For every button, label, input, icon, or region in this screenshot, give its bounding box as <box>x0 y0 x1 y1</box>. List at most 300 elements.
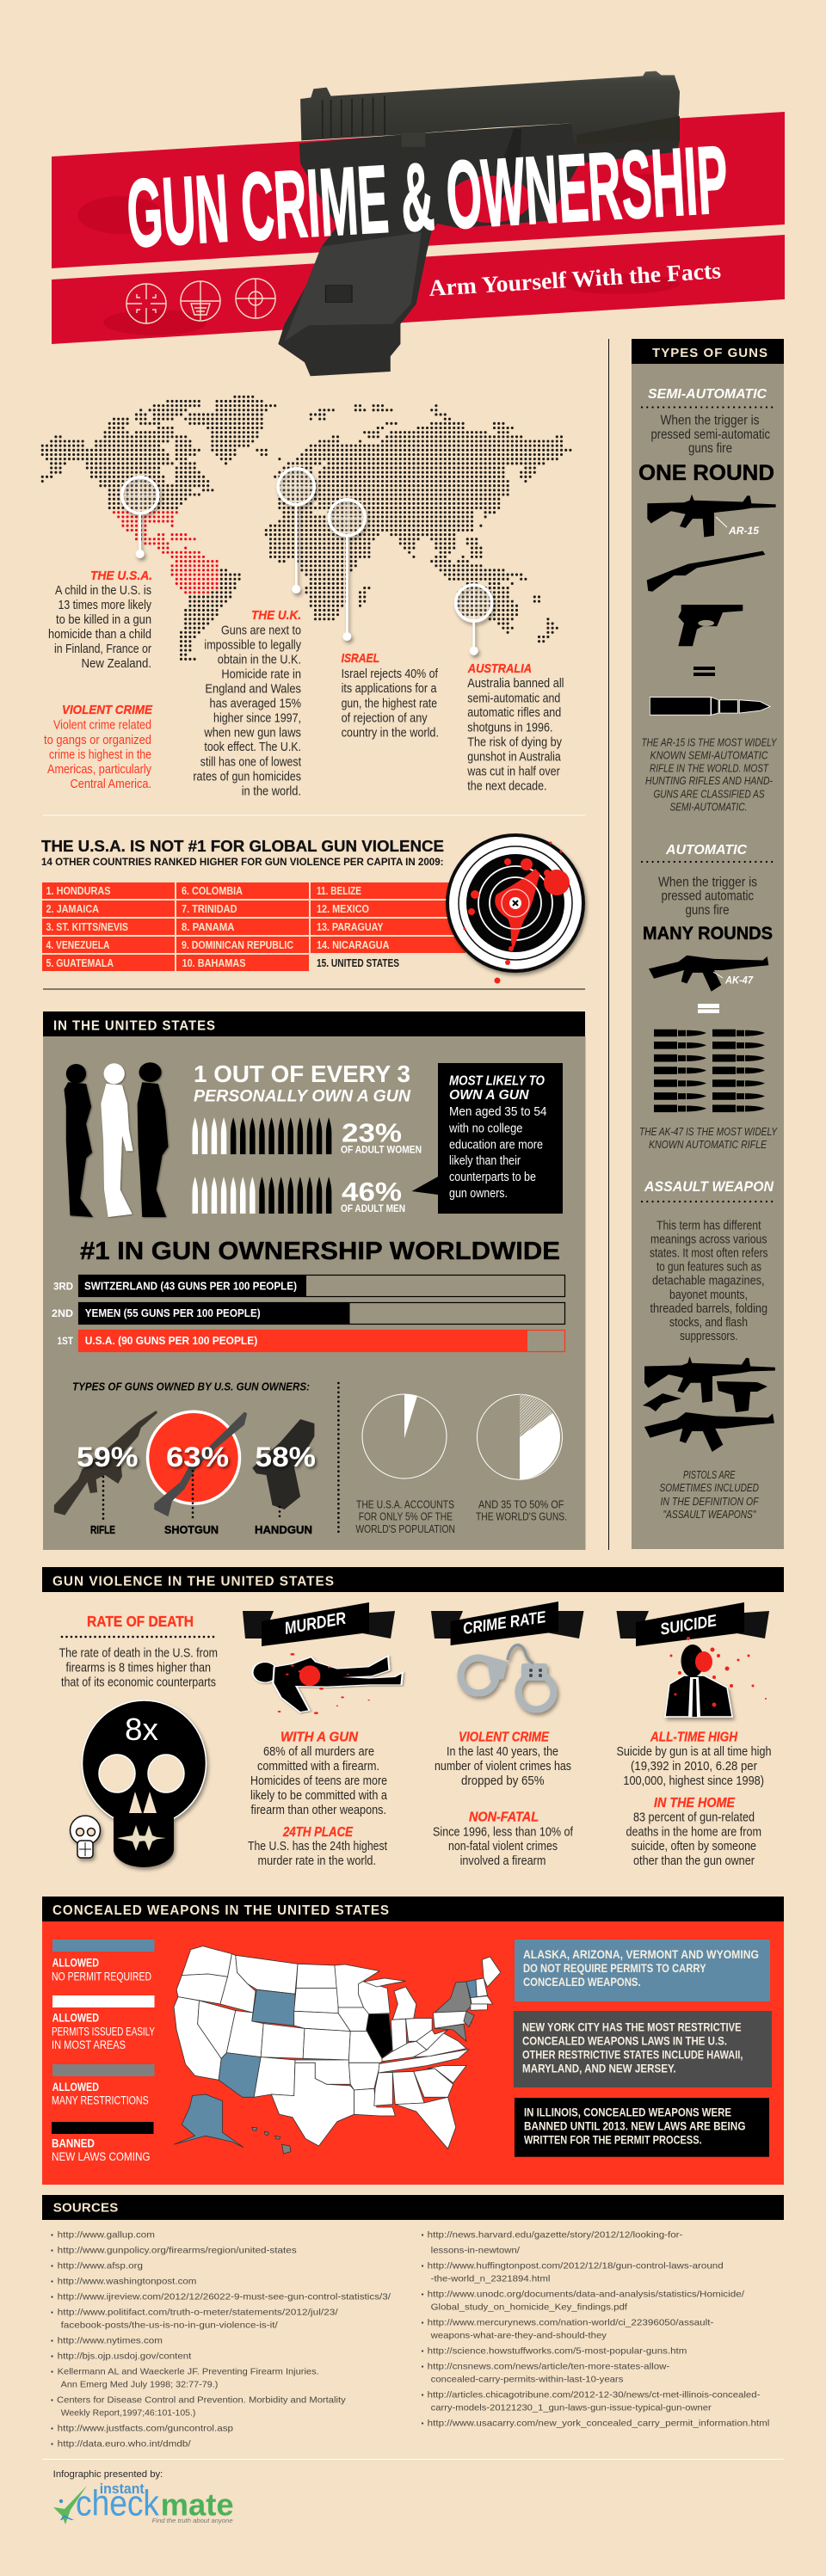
stat: 46 percent of adult men: OF ADULT MEN <box>341 1202 405 1214</box>
panel: types of guns sidebar <box>632 339 784 1549</box>
caption: gun share: AND 35 TO 50% OF <box>478 1498 564 1510</box>
text block: Australia: was cut in half over <box>466 764 560 778</box>
label: AR-15 <box>716 517 759 537</box>
text: with a gun <box>250 1730 388 1817</box>
text block: Australia: shotguns in 1996. <box>467 720 552 735</box>
callout: most likely to own a gun: with no college <box>448 1122 523 1136</box>
source list: right column: concealed-carry-permits-within-last-10-years <box>431 2375 623 2385</box>
table: country ranking: 8. PANAMA <box>182 920 235 933</box>
icon: assault weapons group <box>643 1356 775 1452</box>
text block: violent crime: VIOLENT CRIME <box>62 703 153 717</box>
text: pistols note: IN THE DEFINITION OF <box>661 1496 760 1508</box>
ribbon: suicide: SUICIDE <box>659 1612 719 1639</box>
text block: Israel: of rejection of any <box>342 710 428 725</box>
text: 24th place: 24TH PLACE <box>282 1825 354 1840</box>
icon: pistol silhouette <box>678 605 743 646</box>
legend: banned: NEW LAWS COMING <box>52 2149 150 2163</box>
text: automatic description: When the trigger is <box>658 876 757 889</box>
text: with a gun: WITH A GUN <box>280 1730 358 1744</box>
text: AR-15 note <box>642 736 778 814</box>
callout: most likely to own a gun: gun owners. <box>449 1186 508 1201</box>
subheading: countries ranked higher: 14 OTHER COUNTRIES RANKED HIGHER FOR GUN VIOLENCE PER CAPITA IN 2009: <box>41 856 444 868</box>
source list: left column: http://www.gunpolicy.org/firearms/region/united-states <box>58 2246 297 2256</box>
text: AK-47 note: KNOWN AUTOMATIC RIFLE <box>649 1139 767 1151</box>
text: automatic description: guns fire <box>685 903 730 918</box>
label: AK-47: AK-47 <box>724 974 754 986</box>
text: assault weapon description: meanings across various <box>650 1233 767 1247</box>
text: pistols note <box>659 1469 760 1521</box>
bar chart: guns per 100 people: 2ND <box>52 1307 73 1319</box>
text: in the home: IN THE HOME <box>654 1796 736 1811</box>
subheading: personally own a gun: PERSONALLY OWN A GUN <box>194 1088 411 1106</box>
table: country ranking: 14. NICARAGUA <box>317 938 390 951</box>
callout: most likely to own a gun: education are more <box>449 1138 543 1153</box>
header: title banner with pistol <box>52 71 785 376</box>
source list: left column: Weekly Report,1997;46:101-105.) <box>61 2408 195 2419</box>
source list: left column: http://bjs.ojp.usdoj.gov/content <box>58 2352 191 2362</box>
text: AK-47 note: THE AK-47 IS THE MOST WIDELY <box>639 1126 778 1138</box>
text: AR-15 note: RIFLE IN THE WORLD. MOST <box>650 762 769 774</box>
text: assault weapon description: bayonet mounts, <box>669 1288 748 1302</box>
text: all-time high: Suicide by gun is at all time high <box>616 1744 771 1759</box>
text: AR-15 note: THE AR-15 IS THE MOST WIDELY <box>642 736 778 748</box>
table: country ranking: 10. BAHAMAS <box>182 956 246 969</box>
logo: instant checkmate: check <box>76 2482 160 2523</box>
text block: the U.K.: Homicide rate in <box>221 667 301 682</box>
table: country ranking: 13. PARAGUAY <box>317 920 384 933</box>
legend: banned: BANNED <box>52 2136 95 2150</box>
logo: instant checkmate: instant <box>100 2481 145 2497</box>
source list: left column: http://www.politifact.com/truth-o-meter/statements/2012/jul/23/ <box>58 2308 338 2318</box>
text: automatic description <box>658 876 757 918</box>
panel header <box>43 1011 585 1036</box>
text: AR-15 note: KNOWN SEMI-AUTOMATIC <box>650 750 768 762</box>
legend: many restrictions: MANY RESTRICTIONS <box>52 2093 149 2107</box>
text block: Israel: Israel rejects 40% of <box>342 667 439 681</box>
icon: hunting rifle silhouette <box>647 551 765 592</box>
text: violent crime drop: dropped by 65% <box>461 1774 545 1788</box>
text: assault weapon description: to gun features such as <box>656 1261 761 1275</box>
text block: Israel: its applications for a <box>342 681 437 696</box>
text block: violent crime: to gangs or organized <box>44 733 151 747</box>
text block: violent crime: Central America. <box>71 777 151 791</box>
text: 24th place: The U.S. has the 24th highest <box>248 1839 388 1854</box>
text: with a gun: Homicides of teens are more <box>250 1774 387 1788</box>
source list: right column: -the-world_n_2321894.html <box>431 2274 550 2284</box>
table: country ranking: 7. TRINIDAD <box>182 902 237 915</box>
table: country ranking: 5. GUATEMALA <box>46 956 114 969</box>
section header: CONCEALED WEAPONS IN THE UNITED STATES <box>52 1903 390 1918</box>
ribbon: crime rate <box>431 1602 583 1645</box>
callout: New York City: NEW YORK CITY HAS THE MOST RESTRICTIVE <box>522 2020 742 2034</box>
table: country ranking: 9. DOMINICAN REPUBLIC <box>182 938 293 951</box>
text: assault weapon description: stocks, and flash <box>669 1316 748 1330</box>
text: pistols note: PISTOLS ARE <box>683 1469 736 1481</box>
callout: Illinois: BANNED UNTIL 2013. NEW LAWS ARE BEING <box>524 2119 746 2133</box>
panel header: IN THE UNITED STATES <box>53 1019 216 1034</box>
sidebar header <box>632 339 784 364</box>
heading: not number one: THE U.S.A. IS NOT #1 FOR GLOBAL GUN VIOLENCE <box>41 837 444 855</box>
text: all-time high <box>616 1730 771 1788</box>
source list: right column: carry-models-20121230_1_gun-laws-gun-issue-typical-gun-owner <box>431 2403 712 2413</box>
callout: no permit states: CONCEALED WEAPONS. <box>523 1975 641 1989</box>
logo: instant checkmate: mate <box>161 2487 234 2522</box>
text block: the U.K.: has averaged 15% <box>210 697 301 710</box>
table: country ranking: 15. UNITED STATES <box>317 956 399 969</box>
icon: bloody target <box>446 833 585 984</box>
legend: banned <box>52 2122 153 2163</box>
map: United States concealed carry <box>174 1946 501 2154</box>
section header: GUN VIOLENCE IN THE UNITED STATES <box>52 1574 335 1589</box>
text: 24th place <box>248 1825 388 1868</box>
icon: suicide figure with blood <box>665 1637 767 1717</box>
source list: left column: facebook-posts/the-us-is-no-in-gun-violence-is-it/ <box>61 2321 278 2331</box>
text: in the home: deaths in the home are from <box>626 1824 761 1839</box>
text block: Israel: ISRAEL <box>342 651 379 666</box>
text block: the U.K.: took effect. The U.K. <box>204 740 301 754</box>
section: semi-automatic heading: SEMI-AUTOMATIC <box>648 387 767 402</box>
icon: handcuffs <box>461 1645 554 1710</box>
callout: New York City: MARYLAND, AND NEW JERSEY. <box>522 2062 676 2075</box>
ribbon: murder <box>243 1602 395 1646</box>
icon: scope reticle three <box>236 279 275 318</box>
icon: AR-15 silhouette <box>647 495 776 538</box>
callout: New York City: OTHER RESTRICTIVE STATES INCLUDE HAWAII, <box>522 2048 743 2062</box>
text: AK-47 note <box>639 1126 778 1151</box>
text: semi-automatic description: guns fire <box>688 441 732 456</box>
logo: instant checkmate: Find the truth about anyone <box>152 2517 233 2524</box>
callout: Illinois: IN ILLINOIS, CONCEALED WEAPONS WERE <box>524 2106 731 2119</box>
text block: violent crime <box>44 703 153 791</box>
text block: the U.S.A.: A child in the U.S. is <box>55 583 151 598</box>
sidebar header: TYPES OF GUNS <box>652 346 767 360</box>
text block: Israel: country in the world. <box>342 725 439 740</box>
source list: right column: http://www.mercurynews.com/nation-world/ci_22396050/assault- <box>428 2318 714 2328</box>
text block: violent crime: Americas, particularly <box>47 762 151 777</box>
text: in the home <box>626 1796 761 1868</box>
stat: 46 percent of adult men: 46% <box>342 1177 402 1207</box>
label: AR-15: AR-15 <box>728 525 759 537</box>
bar chart: guns per 100 people: 1ST <box>57 1335 74 1347</box>
callout: no permit states <box>515 1940 770 2001</box>
column: rate of death: The rate of death in the U.S. from <box>59 1646 218 1661</box>
source list: right column: http://articles.chicagotribune.com/2012-12-30/news/ct-met-illinois-concealed- <box>428 2390 761 2401</box>
column: rate of death: RATE OF DEATH <box>87 1613 194 1630</box>
heading: number one in ownership: #1 IN GUN OWNERSHIP WORLDWIDE <box>80 1238 560 1265</box>
text block: the U.K.: still has one of lowest <box>200 754 302 769</box>
source list: left column: http://data.euro.who.int/dmdb/ <box>58 2439 191 2450</box>
source list: left column <box>51 2230 391 2450</box>
text block: the U.S.A.: in Finland, France or <box>54 642 151 656</box>
icon: three people silhouettes <box>64 1062 169 1217</box>
text: violent crime drop <box>435 1730 571 1788</box>
icon: scope reticle two <box>181 281 220 321</box>
source list: left column: http://www.ijreview.com/2012/12/26022-9-must-see-gun-control-statistics/3/ <box>58 2292 391 2302</box>
callout: most likely to own a gun: counterparts to be <box>449 1170 536 1184</box>
legend: many restrictions <box>52 2064 155 2107</box>
source list: right column <box>422 2230 769 2429</box>
column: rate of death: that of its economic counterparts <box>61 1675 216 1690</box>
section header <box>42 1567 784 1592</box>
text: 24th place: murder rate in the world. <box>258 1854 376 1868</box>
callout: most likely to own a gun: OWN A GUN <box>449 1088 529 1103</box>
bar chart: guns per 100 people: YEMEN (55 GUNS PER 100 PEOPLE) <box>85 1307 261 1319</box>
table: country ranking: 4. VENEZUELA <box>46 938 110 951</box>
text: semi-automatic description <box>650 413 770 456</box>
source list: right column: http://www.huffingtonpost.com/2012/12/18/gun-control-laws-around <box>428 2261 724 2272</box>
icon: body with blood <box>254 1653 402 1714</box>
caption: gun share: THE WORLD'S GUNS. <box>476 1511 567 1523</box>
banner texture blotches <box>77 174 706 335</box>
source list: left column: http://www.nytimes.com <box>58 2336 163 2346</box>
text: AR-15 note: GUNS ARE CLASSIFIED AS <box>654 788 765 800</box>
icon: equals sign <box>693 667 715 676</box>
text block: Israel <box>342 651 439 740</box>
section header: SOURCES <box>53 2200 118 2215</box>
heading: one in three: 1 OUT OF EVERY 3 <box>194 1061 410 1087</box>
callout: Illinois <box>515 2098 769 2157</box>
callout pin: U.S.A. scope <box>122 477 158 558</box>
caption: population share: WORLD'S POPULATION <box>355 1523 455 1535</box>
text: automatic description: pressed automatic <box>661 889 754 903</box>
text block: the U.S.A.: THE U.S.A. <box>90 569 152 583</box>
legend: permits issued easily <box>52 1995 155 2051</box>
text block: Australia: automatic rifles and <box>467 705 561 720</box>
icon: shotgun <box>154 1412 247 1516</box>
text block: the U.K. <box>193 608 302 799</box>
legend: permits issued easily: IN MOST AREAS <box>52 2038 126 2051</box>
caption: population share <box>355 1498 455 1535</box>
banner: red title strip <box>52 112 785 268</box>
text: in the home: suicide, often by someone <box>632 1839 756 1854</box>
text: all-time high: (19,392 in 2010, 6.28 per <box>631 1759 757 1774</box>
gun type labels <box>90 1523 312 1536</box>
icon: small skull <box>71 1816 100 1858</box>
bar chart: guns per 100 people: U.S.A. (90 GUNS PER 100 PEOPLE) <box>85 1335 257 1347</box>
text: assault weapon description: This term has different <box>656 1219 761 1233</box>
text block: Australia: The risk of dying by <box>467 735 562 750</box>
bar chart: guns per 100 people: SWITZERLAND (43 GUNS PER 100 PEOPLE) <box>84 1280 297 1292</box>
source list: right column: lessons-in-newtown/ <box>431 2246 520 2256</box>
text: non-fatal: non-fatal violent crimes <box>448 1839 558 1854</box>
map: dotted world map <box>42 397 573 659</box>
text block: the U.S.A. <box>48 569 152 671</box>
icon: single bullet <box>650 698 770 715</box>
heading: types of guns owned: TYPES OF GUNS OWNED BY U.S. GUN OWNERS: <box>72 1381 310 1393</box>
source list: right column: http://www.usacarry.com/new_york_concealed_carry_permit_information.html <box>428 2419 769 2429</box>
source list: left column: Kellermann AL and Waeckerle JF. Preventing Firearm Injuries. <box>58 2367 319 2377</box>
stat: handgun percent: 58% <box>255 1442 316 1472</box>
caption: population share: THE U.S.A. ACCOUNTS <box>356 1498 454 1510</box>
text: violent crime drop: In the last 40 years, the <box>447 1744 558 1759</box>
text block: the U.K.: obtain in the U.K. <box>218 652 301 667</box>
legend: many restrictions: ALLOWED <box>52 2080 99 2093</box>
callout: most likely to own a gun: MOST LIKELY TO <box>449 1074 545 1089</box>
pie chart: world gun share <box>477 1394 563 1479</box>
stat: 23 percent of adult women <box>341 1118 422 1156</box>
stat: 46 percent of adult men <box>341 1177 405 1214</box>
ribbon: crime rate: CRIME RATE <box>462 1608 548 1638</box>
callout: no permit states: DO NOT REQUIRE PERMITS TO CARRY <box>523 1961 706 1975</box>
callout: most likely to own a gun: likely than their <box>449 1153 521 1168</box>
callout: Illinois: WRITTEN FOR THE PERMIT PROCESS. <box>524 2133 702 2147</box>
text: pistols note: "ASSAULT WEAPONS" <box>663 1509 756 1521</box>
heading: many rounds: MANY ROUNDS <box>643 924 773 944</box>
text: violent crime drop: number of violent crimes has <box>435 1759 571 1774</box>
heading: one round: ONE ROUND <box>638 461 774 485</box>
section header <box>42 2195 784 2220</box>
text block: the U.K.: in the world. <box>242 784 301 799</box>
text block: Australia: gunshot in Australia <box>467 750 561 765</box>
legend: no permit required: NO PERMIT REQUIRED <box>52 1969 151 1983</box>
source list: left column: Centers for Disease Control and Prevention. Morbidity and Mortality <box>57 2395 346 2406</box>
text block: Australia: the next decade. <box>467 779 547 794</box>
text block: the U.K.: England and Wales <box>205 682 301 697</box>
text: assault weapon description <box>650 1219 767 1343</box>
callout pin: Australia scope <box>456 585 492 655</box>
text: with a gun: committed with a firearm. <box>257 1759 379 1774</box>
text: non-fatal: Since 1996, less than 10% of <box>433 1824 574 1839</box>
source list: left column: http://www.washingtonpost.com <box>58 2277 197 2287</box>
section: sources <box>42 2195 784 2450</box>
icon: AK-47 silhouette <box>649 956 768 992</box>
table: country ranking: 3. ST. KITTS/NEVIS <box>46 920 128 933</box>
text: assault weapon description: detachable magazines, <box>652 1275 764 1288</box>
source list: left column: http://www.afsp.org <box>58 2261 143 2272</box>
column: rate of death: firearms is 8 times higher than <box>65 1661 211 1675</box>
text: non-fatal: NON-FATAL <box>469 1811 539 1825</box>
text block: the U.S.A.: New Zealand. <box>81 656 151 671</box>
source list: right column: Global_study_on_homicide_Key_findings.pdf <box>431 2302 627 2313</box>
text: violent crime drop: VIOLENT CRIME <box>459 1730 550 1744</box>
pie chart: world population share <box>362 1394 447 1479</box>
icon: big skull 8x <box>83 1700 206 1867</box>
bar chart: guns per 100 people <box>52 1275 564 1352</box>
source list: right column: http://www.unodc.org/documents/data-and-analysis/statistics/Homicide/ <box>428 2290 744 2300</box>
icon: rifle <box>54 1411 157 1515</box>
text block: the U.K.: THE U.K. <box>251 608 301 623</box>
stat: 23 percent of adult women: OF ADULT WOMEN <box>341 1144 422 1156</box>
text: semi-automatic description: pressed semi-automatic <box>650 427 770 442</box>
icon: shotgun highlight circle <box>148 1411 239 1503</box>
icon: many bullets <box>654 1030 765 1112</box>
table: country ranking: 6. COLOMBIA <box>182 884 243 897</box>
ribbon: murder: MURDER <box>283 1609 348 1638</box>
label: AK-47 <box>713 972 754 986</box>
table: country ranking: 12. MEXICO <box>317 902 369 915</box>
gun type labels: RIFLE <box>90 1523 115 1536</box>
text: all-time high: ALL-TIME HIGH <box>650 1730 737 1744</box>
source list: left column: http://www.justfacts.com/guncontrol.asp <box>58 2424 233 2434</box>
text: non-fatal <box>433 1811 574 1868</box>
image: pistol drawing <box>278 71 680 376</box>
text: AR-15 note: HUNTING RIFLES AND HAND- <box>645 775 773 787</box>
ribbon: suicide <box>616 1602 769 1646</box>
text block: Australia <box>466 661 564 794</box>
text block: the U.K.: higher since 1997, <box>213 710 301 725</box>
text block: violent crime: crime is highest in the <box>49 747 151 762</box>
text: semi-automatic description: When the trigger is <box>661 413 760 428</box>
table: country ranking: 2. JAMAICA <box>46 902 100 915</box>
text block: the U.K.: impossible to legally <box>204 638 301 653</box>
callout: no permit states: ALASKA, ARIZONA, VERMONT AND WYOMING <box>523 1947 759 1961</box>
source list: left column: Ann Emerg Med July 1998; 32:77-79.) <box>61 2380 218 2390</box>
legend: permits issued easily: PERMITS ISSUED EASILY <box>52 2025 155 2038</box>
icon: scope reticle one <box>126 284 166 323</box>
stat: 23 percent of adult women: 23% <box>342 1118 402 1148</box>
text: pistols note: SOMETIMES INCLUDED <box>659 1482 759 1494</box>
callout pin: Israel scope <box>329 500 365 641</box>
gun type labels: SHOTGUN <box>164 1523 219 1536</box>
text: non-fatal: involved a firearm <box>460 1854 546 1868</box>
text: in the home: other than the gun owner <box>633 1854 755 1868</box>
text: in the home: 83 percent of gun-related <box>633 1811 755 1825</box>
icon: equals sign white <box>698 1004 719 1013</box>
icon row: bullets 23 percent <box>193 1117 331 1154</box>
icon: big skull 8x: 8x <box>125 1712 158 1747</box>
icon: handgun <box>252 1419 314 1509</box>
legend: no permit required <box>52 1940 155 1983</box>
text block: the U.K.: when new gun laws <box>204 725 301 740</box>
stat: shotgun percent: 63% <box>166 1442 229 1472</box>
text: with a gun: 68% of all murders are <box>263 1744 374 1759</box>
logo: instant checkmate <box>53 2481 234 2524</box>
text block: the U.K.: Guns are next to <box>221 623 301 638</box>
callout: New York City <box>514 2011 772 2087</box>
legend: no permit required: ALLOWED <box>52 1956 99 1970</box>
table: country ranking: 11. BELIZE <box>317 884 361 897</box>
stat: rifle percent: 59% <box>77 1442 138 1472</box>
text block: Australia: semi-automatic and <box>467 691 560 705</box>
callout: New York City: CONCEALED WEAPONS LAWS IN THE U.S. <box>522 2034 727 2048</box>
bar chart: guns per 100 people: 3RD <box>53 1280 73 1292</box>
banner: red subtitle strip <box>52 235 785 344</box>
panel: in the United States <box>43 1011 585 1550</box>
text: assault weapon description: suppressors. <box>680 1330 738 1343</box>
source list: right column: http://science.howstuffworks.com/5-most-popular-guns.htm <box>428 2346 687 2357</box>
text: AR-15 note: SEMI-AUTOMATIC. <box>669 802 747 814</box>
text: assault weapon description: threaded barrels, folding <box>650 1302 767 1316</box>
gun type labels: HANDGUN <box>255 1523 312 1536</box>
icon row: bullets 46 percent <box>193 1177 331 1214</box>
source list: left column: http://www.gallup.com <box>58 2230 155 2241</box>
text block: violent crime: Violent crime related <box>53 717 151 733</box>
text block: the U.K.: rates of gun homicides <box>193 769 301 784</box>
section: concealed weapons <box>42 1897 784 2185</box>
text: all-time high: 100,000, highest since 1998) <box>623 1774 764 1788</box>
subtitle: Arm Yourself With the Facts <box>428 257 722 301</box>
table: country ranking: 1. HONDURAS <box>46 884 111 897</box>
callout: most likely to own a gun <box>412 1063 563 1214</box>
text block: the U.S.A.: 13 times more likely <box>59 598 151 612</box>
source list: right column: http://cnsnews.com/news/article/ten-more-states-allow- <box>428 2362 670 2372</box>
text: with a gun: firearm than other weapons. <box>251 1803 386 1817</box>
callout: most likely to own a gun: Men aged 35 to 54 <box>449 1104 547 1119</box>
source list: right column: weapons-what-are-they-and-should-they <box>430 2331 607 2341</box>
section: automatic heading: AUTOMATIC <box>665 843 748 858</box>
text: with a gun: likely to be committed with a <box>250 1788 388 1803</box>
callout pin: U.K. scope <box>278 469 314 593</box>
text block: Israel: gun, the highest rate <box>342 697 437 710</box>
source list: right column: http://news.harvard.edu/gazette/story/2012/12/looking-for- <box>428 2230 683 2241</box>
legend: permits issued easily: ALLOWED <box>52 2011 99 2025</box>
text block: the U.S.A.: homicide than a child <box>48 627 151 642</box>
section: assault weapon heading: ASSAULT WEAPON <box>644 1178 774 1195</box>
text block: Australia: Australia banned all <box>467 676 564 691</box>
column: rate of death <box>59 1613 218 1690</box>
section: gun violence in the United States <box>42 1567 784 1868</box>
text block: the U.S.A.: to be killed in a gun <box>56 612 151 627</box>
